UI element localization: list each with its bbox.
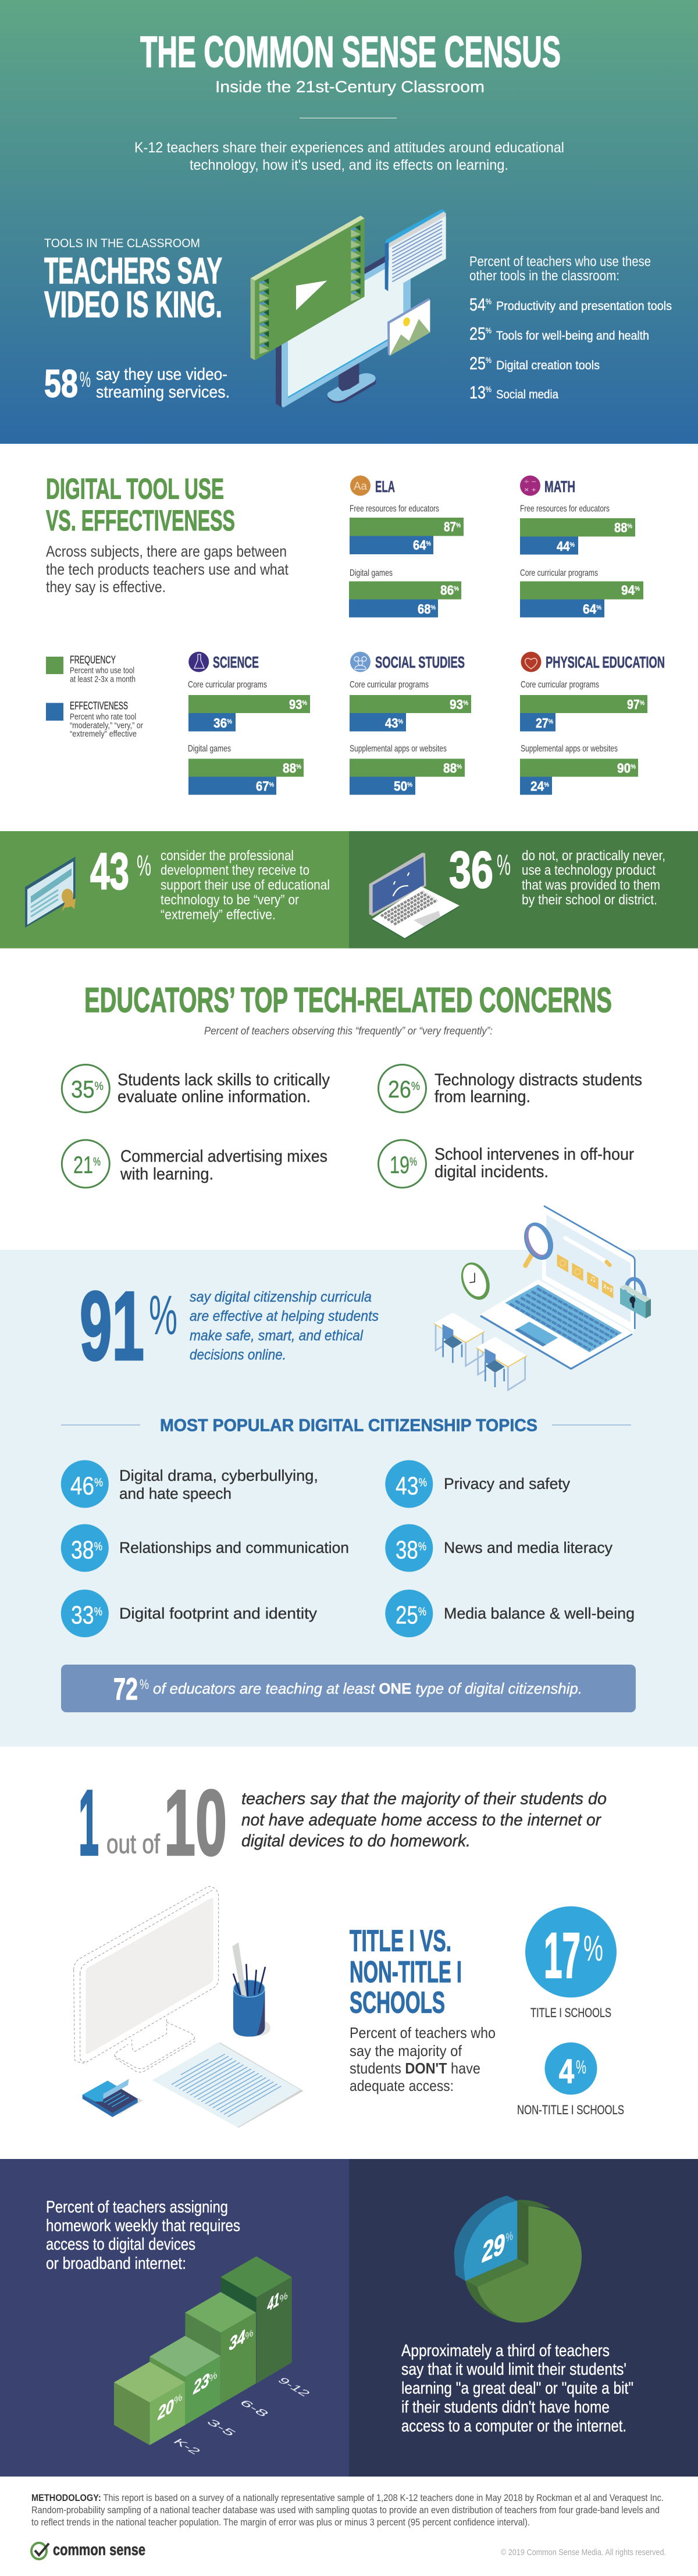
photo panel (387, 298, 430, 356)
illustration: monitor with video panel (251, 209, 446, 408)
list: other tools: 25 (469, 353, 489, 373)
subject: Science: 93 (289, 697, 304, 712)
text: homework (46, 2198, 240, 2273)
panel: homework by grade (0, 2159, 349, 2477)
callout: 72 percent: 72 (113, 1672, 138, 1706)
topic: 46 percent: Digital drama, cyberbullying, (119, 1467, 318, 1484)
intro text (46, 543, 289, 596)
intro text (134, 140, 564, 173)
heading: Title I schools: NON-TITLE I (350, 1955, 462, 1989)
subject: Social Studies: % (463, 700, 468, 707)
subject: ELA (349, 476, 464, 618)
heading: tools in the classroom: VIDEO IS KING. (44, 284, 222, 325)
list: other tools: Social media (496, 388, 558, 401)
heading: Title I schools: SCHOOLS (350, 1986, 445, 2019)
bar: 9-12 (220, 2256, 312, 2398)
stat: 36 percent: % (497, 849, 511, 881)
logo: common sense: common sense (53, 2541, 145, 2559)
subject: ELA: % (426, 540, 431, 547)
stat: non-Title I 4 percent (517, 2043, 624, 2117)
heading: Title I schools: TITLE I VS. (350, 1924, 451, 1958)
topic: 38 percent: % (94, 1540, 102, 1553)
list: other tools: 54 (469, 294, 489, 315)
stat: Title I 17 percent: % (583, 1929, 603, 1969)
text: adequate access: adequate access: (350, 2077, 454, 2094)
concern: 35 percent (62, 1064, 330, 1112)
text: homework: or broadband internet: (46, 2254, 186, 2273)
subject: Social Studies: % (398, 718, 403, 725)
panel: hero header (0, 0, 698, 444)
topic: 38 percent: 38 (71, 1535, 99, 1565)
text block: methodology (31, 2493, 664, 2528)
subject: Science: Core curricular programs (188, 680, 267, 690)
panel: professional development stat (0, 831, 349, 948)
text: limitation: access to a computer or the internet. (401, 2417, 626, 2436)
legend: Percent who rate tool (70, 712, 136, 722)
intro text: they say is effective. (46, 578, 166, 596)
notepad (83, 2079, 143, 2117)
clock (456, 1258, 495, 1304)
callout: 72 percent: of educators are teaching at least ONE type of digital citizenship. (153, 1680, 582, 1697)
stat: 58 percent: % (80, 368, 91, 392)
list: other tools: % (486, 326, 492, 335)
subject: ELA: % (456, 522, 461, 529)
list: other tools: 13 (469, 382, 489, 402)
subject: Math: % (569, 541, 575, 548)
text: adequate access: Percent of teachers who (350, 2024, 496, 2041)
stat: 58 percent: streaming services. (96, 383, 230, 401)
list: other tools (469, 254, 672, 402)
subject: ELA: ELA (375, 478, 395, 496)
text: home access: teachers say that the majority of their students do (241, 1790, 607, 1808)
chart: 3D pie 29 percent: 29 (480, 2226, 507, 2269)
list: other tools: % (486, 297, 492, 306)
subject: Math: × + (524, 486, 536, 494)
concern: 19 percent: 19 (390, 1151, 417, 1178)
panel: digital tool use vs effectiveness (46, 472, 665, 794)
topic: 33 percent: 33 (71, 1601, 99, 1630)
text: homework: access to digital devices (46, 2235, 195, 2254)
concern: 26 percent (378, 1064, 642, 1112)
subject: Physical Education: Core curricular programs (521, 680, 599, 690)
stat: non-Title I 4 percent: NON-TITLE I SCHOOLS (517, 2103, 624, 2117)
list: other tools: % (486, 384, 492, 394)
concern: 19 percent: % (409, 1156, 417, 1168)
concern: 35 percent: evaluate online information. (117, 1088, 311, 1106)
padlock (620, 1279, 651, 1319)
bar: K-2: K-2 (170, 2437, 203, 2456)
topic: 25 percent (385, 1590, 635, 1637)
concern: 21 percent: with learning. (120, 1165, 213, 1184)
concern: 26 percent: % (411, 1080, 420, 1093)
bar: 3-5 (149, 2336, 238, 2438)
text: professional development: support their use of educational (161, 877, 330, 893)
subject: Math: Core curricular programs (520, 568, 598, 578)
magnifying glass (519, 1218, 558, 1266)
topic: 25 percent: 25 (396, 1601, 424, 1630)
legend: at least 2-3x a month (70, 675, 136, 684)
subject: Physical Education: 27 (536, 715, 551, 731)
subject: Science: 67 (256, 778, 271, 793)
text: home access: digital devices to do homework. (241, 1832, 471, 1851)
stat: 1 out of 10: 10 (164, 1770, 227, 1875)
subject: Math: Free resources for educators (520, 504, 610, 514)
bar: 3-5: 23 (192, 2368, 211, 2399)
concern: 21 percent: 21 (73, 1151, 101, 1178)
stat: 43 percent: 43 (90, 842, 129, 900)
text: homework: homework weekly that requires (46, 2217, 240, 2235)
text: curricula effectiveness: make safe, smart, and ethical (190, 1327, 364, 1344)
subject: ELA: 64 (413, 537, 428, 553)
subject: Math: MATH (544, 478, 575, 496)
subject: Science: 88 (283, 761, 298, 776)
bar: 6-8: 6-8 (236, 2399, 271, 2418)
legend: “moderately,” “very,” or (70, 721, 143, 731)
subject: Social Studies: % (407, 782, 412, 789)
subject: Physical Education: 90 (617, 761, 632, 776)
topic: 38 percent news: News and media literacy (444, 1539, 612, 1556)
bar: 3-5: 3-5 (204, 2418, 238, 2438)
stat: Title I 17 percent (525, 1907, 617, 2020)
topic: 38 percent (61, 1524, 349, 1572)
topic: 43 percent: % (419, 1476, 427, 1489)
subject: Math: % (635, 585, 640, 592)
concern: 26 percent: from learning. (435, 1088, 530, 1106)
text: adequate access (350, 2024, 496, 2094)
stat: 58 percent: say they use video- (96, 365, 227, 384)
concern: 21 percent (62, 1140, 327, 1188)
legend: FREQUENCY (70, 654, 116, 665)
subject: ELA: 86 (440, 583, 455, 598)
panel: unused technology stat (349, 831, 698, 948)
text: limitation: if their students didn't have home (401, 2398, 610, 2417)
heading: tools in the classroom (44, 237, 222, 325)
legend: Percent who use tool (70, 665, 134, 676)
stat: 91 percent: 91 (80, 1271, 144, 1381)
bar: K-2: % (174, 2391, 182, 2407)
subject: Social Studies: Supplemental apps or websites (350, 744, 447, 754)
subject: Physical Education: 24 (530, 778, 546, 793)
subject: Physical Education: % (640, 700, 644, 707)
text: unused technology: use a technology product (522, 863, 656, 878)
topic: 43 percent: 43 (396, 1472, 424, 1501)
stat: 36 percent: 36 (449, 840, 493, 899)
list: other tools: Percent of teachers who use these (469, 254, 651, 270)
text: professional development: development they receive to (161, 863, 309, 878)
text: limitation (401, 2342, 633, 2436)
text: adequate access: students DON'T have (350, 2060, 480, 2077)
topic: 43 percent (385, 1460, 570, 1508)
topic: 46 percent: and hate speech (119, 1485, 232, 1502)
dashed monitor outline (74, 1886, 219, 2072)
concern: 35 percent: % (95, 1080, 104, 1093)
concern: 19 percent (378, 1140, 634, 1188)
legend: EFFECTIVENESS (70, 700, 128, 712)
topic: 38 percent news: 38 (396, 1535, 424, 1565)
subject: Math: % (627, 523, 632, 530)
bar: 6-8: 34 (228, 2324, 247, 2356)
video panel (251, 216, 365, 360)
illustration: laptop with classroom desks (434, 1206, 651, 1390)
chart: 3D pie 29 percent: % (505, 2229, 513, 2245)
concern: 26 percent: 26 (388, 1075, 415, 1103)
subject: Science: % (302, 700, 307, 707)
text: professional development: consider the professional (161, 848, 294, 864)
subject: ELA: Aa (354, 480, 367, 493)
concern: 21 percent: Commercial advertising mixes (120, 1147, 327, 1166)
copyright: © 2019 Common Sense Media. All rights reserved. (501, 2548, 666, 2557)
stat: non-Title I 4 percent: 4 (559, 2053, 574, 2090)
heading: VS. EFFECTIVENESS (46, 504, 235, 537)
subject: ELA: % (430, 604, 436, 611)
text: limitation: say that it would limit their students' (401, 2360, 626, 2379)
topic: 43 percent: Privacy and safety (444, 1475, 570, 1492)
topic: 38 percent news: % (418, 1540, 426, 1553)
bar: 9-12: 41 (266, 2288, 282, 2316)
bar: 6-8 (185, 2292, 271, 2418)
heading: DIGITAL TOOL USE (46, 472, 224, 505)
topic: 33 percent (61, 1590, 318, 1637)
subject: ELA: 68 (418, 601, 433, 617)
bar: 3-5: % (209, 2369, 217, 2385)
subject: Physical Education: 97 (627, 697, 642, 712)
stat: Title I 17 percent: TITLE I SCHOOLS (530, 2005, 611, 2020)
bar: 9-12: 9-12 (275, 2376, 312, 2398)
subject: Physical Education: % (544, 782, 549, 789)
subject: Science (188, 651, 310, 794)
text: homework: Percent of teachers assigning (46, 2198, 228, 2217)
subject: Social Studies (350, 651, 471, 794)
topic: 46 percent: % (94, 1476, 103, 1489)
subject: Math: 88 (614, 520, 629, 535)
laptop: 2+2 (603, 1283, 613, 1294)
stat: 58 percent: 58 (44, 362, 78, 406)
topic: 46 percent (61, 1460, 318, 1508)
subject: Science: % (296, 763, 301, 770)
heading: tools in the classroom: TEACHERS SAY (44, 251, 222, 291)
concern: 21 percent: % (93, 1156, 101, 1168)
list: other tools: Digital creation tools (496, 359, 600, 372)
legend (46, 654, 143, 739)
subject: Math: 44 (557, 539, 572, 554)
chart: isometric stair bars (114, 2256, 312, 2456)
pen cup (232, 1942, 270, 2037)
subject: Social Studies: 88 (443, 761, 458, 776)
topic: 25 percent: % (418, 1605, 426, 1618)
icon: sad laptop (369, 853, 460, 939)
topic: 25 percent: Media balance & well-being (444, 1605, 635, 1622)
subject: Social Studies: 43 (385, 715, 400, 731)
subject: Math (520, 476, 643, 618)
topic: 46 percent: 46 (70, 1472, 99, 1501)
text: home access: not have adequate home access to the internet or (241, 1811, 601, 1830)
text: limitation: learning "a great deal" or "quite a bit" (401, 2379, 633, 2397)
heading (46, 472, 235, 537)
list: other tools: Tools for well-being and health (496, 329, 649, 343)
subject: Math: % (596, 604, 601, 611)
panel: home access (74, 1770, 624, 2128)
bar: 6-8: % (245, 2326, 254, 2342)
concern: 19 percent: digital incidents. (435, 1163, 549, 1181)
heading: Title I schools (350, 1924, 462, 2019)
text: unused technology (522, 848, 665, 908)
text: professional development (161, 848, 330, 922)
logo: common sense (31, 2541, 145, 2559)
bar: K-2 (114, 2362, 203, 2456)
subject: Social Studies: SOCIAL STUDIES (375, 653, 465, 671)
subject: ELA: 87 (444, 519, 459, 534)
concern: 19 percent: School intervenes in off-hour (435, 1145, 634, 1164)
stat: 1 out of 10 (79, 1770, 227, 1875)
stat: 91 percent: % (149, 1284, 177, 1346)
subheading: Percent of teachers observing this “frequently” or “very frequently”: (204, 1025, 493, 1036)
concern: 26 percent: Technology distracts students (435, 1071, 642, 1089)
callout: 72 percent (61, 1665, 636, 1712)
panel: digital citizenship (0, 1206, 698, 1747)
list: other tools: Productivity and presentation tools (496, 300, 672, 313)
list: other tools: 25 (469, 323, 489, 344)
text: curricula effectiveness: say digital citizenship curricula (190, 1289, 372, 1305)
subject: Physical Education: % (549, 718, 553, 725)
callout: 72 percent: % (140, 1677, 149, 1693)
subject: Math: 94 (621, 583, 636, 598)
subject: Science: SCIENCE (213, 653, 259, 671)
intro text: K-12 teachers share their experiences and attitudes around educational (134, 140, 564, 156)
concern: 35 percent: Students lack skills to critically (117, 1071, 330, 1089)
stat: 1 out of 10: 1 (79, 1770, 99, 1875)
heading: most popular topics: MOST POPULAR DIGITAL CITIZENSHIP TOPICS (160, 1416, 537, 1435)
legend: “extremely” effective (70, 729, 137, 739)
text: unused technology: by their school or district. (522, 892, 657, 908)
subject: Social Studies: 93 (450, 697, 465, 712)
icon: diploma (25, 857, 76, 928)
topic: 38 percent news (385, 1524, 612, 1572)
document panel (385, 209, 446, 291)
text block: methodology: to reflect trends in the national teacher population. The margin of error was plus or minus 3 percent (95 percent confidence interval). (31, 2517, 530, 2528)
subject: Physical Education: % (631, 763, 636, 770)
bar: K-2: 20 (156, 2393, 176, 2425)
subject: Math: ÷ − (524, 478, 536, 486)
subject: Social Studies: Core curricular programs (350, 680, 429, 690)
subject: Science: % (227, 718, 232, 725)
topic: 33 percent: % (94, 1605, 102, 1618)
text: curricula effectiveness: are effective at helping students (190, 1308, 379, 1324)
subject: Social Studies: % (457, 763, 462, 770)
stat: non-Title I 4 percent: % (576, 2057, 586, 2078)
text: unused technology: that was provided to them (522, 877, 660, 893)
topic: 38 percent: Relationships and communication (119, 1539, 349, 1556)
subject: Physical Education (520, 651, 665, 794)
text: curricula effectiveness: decisions online. (190, 1347, 286, 1363)
text: home access (241, 1790, 607, 1851)
subject: Social Studies: 50 (394, 778, 409, 793)
desks and chairs (434, 1313, 527, 1390)
stat: Title I 17 percent: 17 (544, 1920, 581, 1991)
topic: 33 percent: Digital footprint and identity (119, 1605, 318, 1622)
text: professional development: “extremely” effective. (161, 907, 276, 922)
list: other tools: other tools in the classroom: (469, 268, 619, 284)
subject: ELA: Digital games (350, 568, 393, 578)
laptop: ♫ (589, 1271, 596, 1285)
subject: ELA: % (454, 585, 459, 592)
panel: learning limitation (349, 2159, 698, 2477)
stat: 43 percent: % (137, 849, 151, 882)
text: adequate access: say the majority of (350, 2042, 462, 2060)
subject: Science: 36 (213, 715, 229, 731)
list: other tools: % (486, 355, 492, 365)
bar: 9-12: % (280, 2289, 288, 2305)
text: curricula effectiveness (190, 1289, 379, 1363)
text: professional development: technology to be “very” or (161, 892, 299, 908)
stat: 1 out of 10: out of (106, 1829, 160, 1859)
intro text: Across subjects, there are gaps between (46, 543, 287, 560)
heading: tools in the classroom: TOOLS IN THE CLASSROOM (44, 237, 200, 250)
concern: 35 percent: 35 (71, 1075, 98, 1103)
panel: top tech-related concerns (62, 981, 642, 1188)
laptop (480, 1206, 635, 1369)
subject: ELA: Free resources for educators (350, 504, 439, 514)
stat: 58 percent (44, 362, 230, 406)
chart: 3D pie 29 percent (454, 2196, 582, 2322)
subject: Science: Digital games (188, 744, 231, 754)
illustration: missing computer on desk (74, 1886, 304, 2128)
subject: Physical Education: Supplemental apps or websites (521, 744, 618, 754)
subtitle: Inside the 21st-Century Classroom (215, 78, 485, 95)
intro text: the tech products teachers use and what (46, 561, 289, 578)
text: unused technology: do not, or practically never, (522, 848, 665, 864)
paper (152, 2043, 304, 2128)
intro text: technology, how it's used, and its effects on learning. (190, 157, 508, 173)
subject: Math: 64 (583, 601, 598, 617)
text: limitation: Approximately a third of teachers (401, 2342, 610, 2360)
subject: Science: % (269, 782, 274, 789)
